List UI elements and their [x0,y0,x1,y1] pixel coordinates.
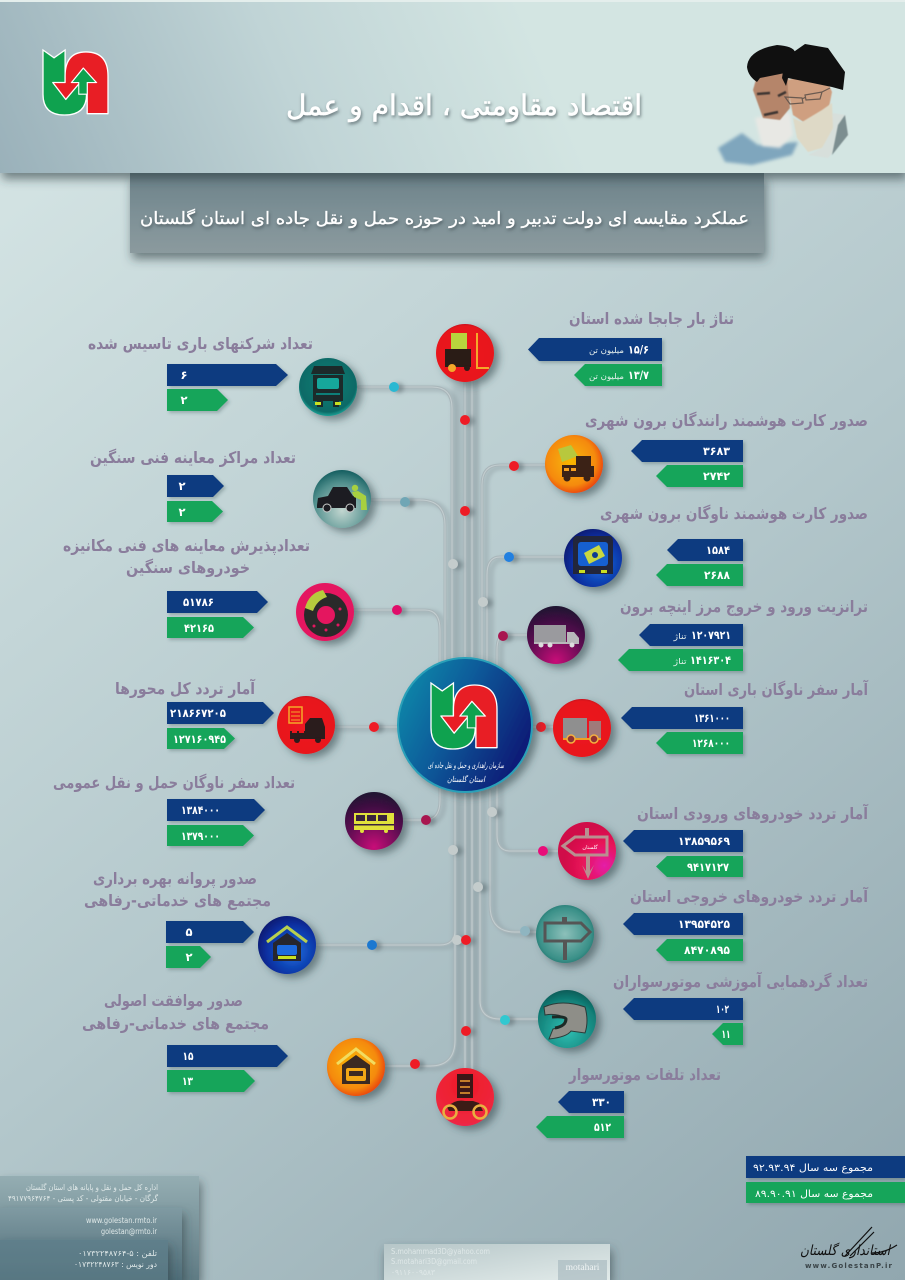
item: freight companies [88,334,357,416]
icon: forklift [436,324,494,382]
icon: clipboard truck [277,696,335,754]
bar green: ۴۲۱۶۵ [184,621,214,635]
bar blue: ۲۱۸۶۶۷۲۰۵ [170,706,226,720]
item: motorcyclist training [538,971,868,1048]
central logo circle [398,658,532,792]
bar green: ۱۲۷۱۶۰۹۴۵ [173,732,226,746]
bar blue [166,921,254,943]
heading: آمار تردد خودروهای ورودی استان [637,803,868,823]
heading line 1: تعدادپذیرش معاینه های فنی مکانیزه [63,536,310,556]
bar blue: ۱۲۰۷۹۲۱ [691,628,731,642]
bar green: ۲۷۴۲ [703,469,730,483]
heading: تعداد شرکتهای باری تاسیس شده [88,334,313,353]
bar blue: ۳۳۰ [592,1095,611,1109]
item: motorcyclist fatalities [436,1065,721,1138]
title: اقتصاد مقاومتی ، اقدام و عمل [286,89,642,122]
panel: designer credit: S.mohammad3D@yahoo.com [391,1247,490,1256]
panel: web contacts [0,1208,182,1280]
bar green: ۲۶۸۸ [704,568,730,582]
bar green: میلیون تن [589,372,624,381]
bar blue [167,364,288,386]
bar blue [623,830,743,852]
heading: آمار تردد خودروهای خروجی استان [630,886,868,906]
bar green [656,732,743,754]
panel: subtitle band [130,173,764,253]
bar green [167,617,254,638]
panel: phone contacts: دور نویس : ۰۱۷۳۲۲۴۸۷۶۳ [74,1260,157,1269]
bar green [656,856,743,877]
icon: welcome sign [558,822,616,880]
item: inspection centers [90,448,371,528]
bar green [167,728,235,749]
bar green: ۱۳۷۹۰۰۰ [181,829,220,843]
bar green: ۱۳/۷ [628,368,649,382]
heading: تناژ بار جابجا شده استان [569,309,734,328]
icon: purple truck [527,606,585,664]
bar blue: ۳۶۸۳ [703,444,730,458]
bar blue [639,624,743,646]
panel: web contacts: golestan@rmto.ir [101,1227,158,1236]
bar blue: ۱۳۸۵۹۵۶۹ [678,834,730,848]
item: transit at Incheh Borun [527,597,868,671]
icon: car repair [313,470,371,528]
bar green: ۸۴۷۰۸۹۵ [684,943,730,957]
icon: orange garage [327,1038,385,1096]
legend: 89-91: مجموع سه سال ۸۹.۹۰.۹۱ [755,1189,873,1200]
bar green: ۲ [180,393,188,407]
bar green [167,389,228,411]
heading line 1: صدور پروانه بهره برداری [93,869,257,889]
bar blue: ۶ [180,368,188,382]
icon: road organisation logo [43,50,108,115]
bar blue [167,591,268,613]
governorate logo [800,1227,897,1270]
heading: ترانزیت ورود و خروج مرز اینچه برون [620,597,868,617]
panel: header [0,0,905,173]
heading line 2: مجتمع های خدماتی-رفاهی [84,891,271,910]
heading line 2: خودروهای سنگین [126,558,250,577]
item: freight fleet trips [553,679,868,757]
item: operating permits [84,869,316,974]
bar green [167,501,223,522]
bar blue [631,440,743,462]
item: preliminary approvals [82,991,385,1096]
bar green [656,939,743,961]
bar blue: ۱۵۸۴ [706,543,730,557]
panel: office address [0,1176,199,1280]
bar green [574,364,662,386]
bar blue [167,702,274,724]
connector pipes [316,380,568,1077]
icon: red truck [553,699,611,757]
heading: تعداد سفر ناوگان حمل و نقل عمومی [53,773,295,792]
heading: تعداد تلفات موتورسوار [568,1065,721,1084]
item: fleet smart cards [564,504,868,587]
icon: logo [431,683,497,749]
panel: designer credit: S.motahari3D@gmail.com [391,1257,477,1266]
bar green [712,1023,743,1045]
left portrait [718,45,798,165]
bar blue: ۱۵ [182,1049,194,1063]
legend: 92-94 [746,1156,905,1178]
panel: designer credit: ۰۹۱۱۶۰۰۹۵۸۳ [391,1268,436,1277]
bar green [166,946,211,968]
bar blue: ۵۱۷۸۶ [183,595,214,609]
bar blue [528,338,662,361]
bar blue: ۲ [178,479,186,493]
item: freight tonnage [436,309,734,386]
panel: phone contacts: تلفن : ۵-۰۱۷۳۲۲۴۸۷۶۴ [78,1249,157,1258]
bar blue: ۱۰۲ [716,1002,729,1016]
right portrait [782,44,848,158]
subtitle: عملکرد مقایسه ای دولت تدبیر و امید در حوزه حمل و نقل جاده ای استان گلستان [140,208,749,229]
panel: phone contacts [0,1240,168,1280]
bar blue [623,913,743,935]
bar blue: ۱۳۹۵۴۵۲۵ [678,917,730,931]
bar green [536,1116,624,1138]
icon: direction sign [536,905,594,963]
bar blue: ۱۳۸۴۰۰۰ [181,803,220,817]
icon: orange truck [545,435,603,493]
item: total traffic [115,678,335,754]
bar green: ۱۲۶۸۰۰۰ [692,736,730,750]
icon: welcome sign: گلستان [582,844,598,851]
bar blue [167,475,224,497]
icon: brake disc [296,583,354,641]
icon: bus [345,792,403,850]
motahari tag [558,1260,607,1280]
panel: web contacts: www.golestan.rmto.ir [86,1216,158,1225]
bar green: ۲ [178,505,186,519]
bar blue [167,799,265,821]
bar green: ۱۳ [182,1074,193,1088]
bar green [656,465,743,487]
bar blue [667,539,743,561]
bar green [618,649,743,671]
bar blue: ۵ [185,925,193,939]
heading: آمار تردد کل محورها [115,678,255,698]
connector dots [367,382,548,1069]
bar green: ۵۱۲ [594,1120,611,1134]
bar blue: ۱۵/۶ [628,342,649,356]
item: inspection admissions [63,536,354,641]
panel: office address: اداره کل حمل و نقل و پایانه های استان گلستان [26,1182,158,1192]
bar green [656,564,743,586]
panel: office address: گرگان - خیابان مقتولی - کد پستی - ۴۹۱۷۷۹۶۴۷۶۴ [8,1193,158,1203]
legend: 89-91 [746,1182,905,1203]
province name: استان گلستان [447,774,486,784]
heading line 1: صدور موافقت اصولی [104,991,243,1010]
bar blue: میلیون تن [589,346,624,355]
bar blue [558,1091,624,1113]
icon: truck [299,358,357,416]
icon: blue garage [258,916,316,974]
bar green: ۹۴۱۷۱۲۷ [687,860,729,874]
icon: helmet [538,990,596,1048]
motahari tag: motahari [566,1263,600,1273]
bar blue: ۱۳۶۱۰۰۰ [694,711,730,725]
legend: 92-94: مجموع سه سال ۹۲.۹۳.۹۴ [753,1163,873,1174]
bar blue [167,1045,288,1067]
bar blue [623,998,743,1020]
item: outbound traffic [536,886,868,963]
bar blue: تناژ [672,632,686,641]
heading: تعداد مراکز معاینه فنی سنگین [90,448,296,467]
governorate logo: استانداری گلستان [800,1242,892,1259]
heading: آمار سفر ناوگان باری استان [684,679,868,699]
bar green: تناژ [672,657,686,666]
portraits [718,44,848,165]
bar green: ۱۴۱۶۳۰۴ [690,653,731,667]
bar green: ۲ [185,950,193,964]
bar blue [621,707,743,729]
icon: motorbike [436,1068,494,1126]
bar green: ۱۱ [722,1027,730,1041]
item: driver smart cards [545,411,868,493]
website: www.GolestanP.ir [805,1262,893,1270]
item: public transport trips [53,773,403,850]
panel: designer credit [384,1244,610,1280]
icon: blue bus [564,529,622,587]
bar green [167,825,254,846]
heading line 2: مجتمع های خدماتی-رفاهی [82,1014,269,1033]
item: inbound traffic [558,803,868,880]
organisation name: سازمان راهداری و حمل و نقل جاده ای [428,761,504,770]
bar green [167,1070,255,1092]
